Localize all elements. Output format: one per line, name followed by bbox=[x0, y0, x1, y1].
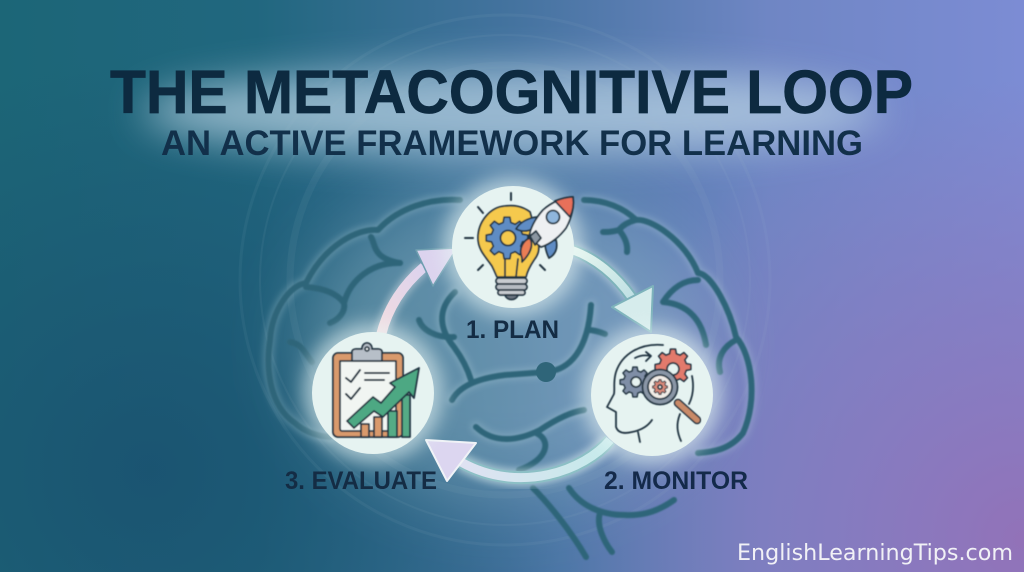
icon: head with gears and magnifier bbox=[607, 345, 697, 442]
website credit: EnglishLearningTips.com bbox=[737, 541, 1013, 566]
brain outline bbox=[268, 200, 752, 557]
evaluate disc bbox=[312, 332, 434, 454]
icon: clipboard with rising chart bbox=[333, 343, 419, 437]
node: plan bbox=[443, 177, 583, 317]
plan halo bbox=[443, 177, 583, 317]
arrow: plan to monitor bbox=[572, 250, 653, 332]
magnifier handle bbox=[678, 403, 697, 420]
gear: grey bbox=[620, 367, 650, 397]
main title: THE METACOGNITIVE LOOP bbox=[110, 58, 913, 126]
title bbox=[110, 58, 913, 163]
icon: light bulb with gear and rocket bbox=[465, 193, 573, 300]
arrow: evaluate to plan bbox=[381, 248, 457, 335]
node: monitor bbox=[582, 325, 722, 465]
evaluate halo bbox=[303, 323, 443, 463]
loop arrows bbox=[381, 248, 653, 481]
gear: red bbox=[655, 349, 691, 385]
node: evaluate bbox=[303, 323, 443, 463]
gear in bulb bbox=[486, 217, 528, 259]
plan disc bbox=[452, 186, 574, 308]
magnifier lens bbox=[642, 370, 678, 404]
faint seal watermark bbox=[240, 15, 770, 545]
monitor halo bbox=[582, 325, 722, 465]
subtitle: AN ACTIVE FRAMEWORK FOR LEARNING bbox=[161, 124, 863, 163]
label: 3. evaluate: 3. EVALUATE bbox=[285, 467, 437, 495]
monitor disc bbox=[591, 334, 713, 456]
brain node bbox=[536, 362, 556, 382]
label: 2. monitor: 2. MONITOR bbox=[604, 467, 748, 495]
brain strokes bbox=[268, 200, 752, 557]
arrow: monitor to evaluate bbox=[426, 440, 610, 481]
brain glow bbox=[268, 200, 752, 453]
label: 1. plan: 1. PLAN bbox=[466, 316, 559, 344]
